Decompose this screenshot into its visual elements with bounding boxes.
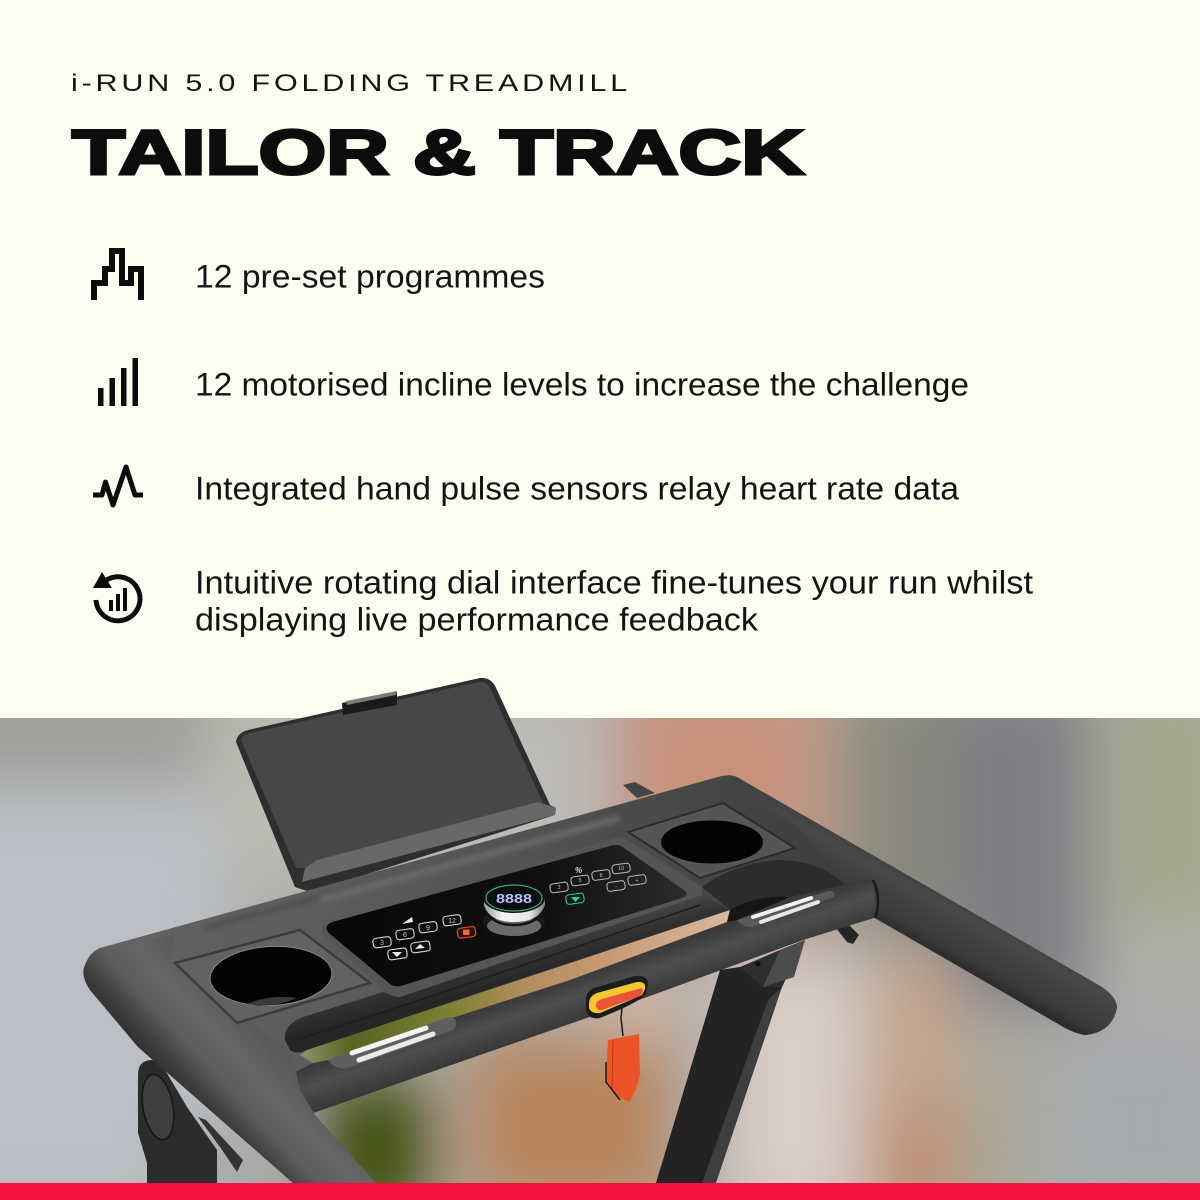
left white grip sensor	[328, 1017, 456, 1068]
crossbar	[270, 880, 877, 1113]
rotating dial	[483, 883, 546, 936]
right opening dark part	[727, 897, 790, 922]
right cup holder	[661, 820, 763, 864]
right stub lever	[836, 924, 859, 944]
opening showing background	[300, 910, 730, 1063]
icon: programme steps	[94, 251, 141, 300]
stop button	[457, 926, 476, 939]
speed buttons: 8	[599, 873, 603, 879]
left bar	[83, 935, 376, 1183]
incline buttons: 3	[380, 940, 384, 947]
right upright leg	[656, 940, 805, 1183]
incline buttons: 9	[426, 925, 430, 932]
control panel	[322, 837, 702, 997]
left cup recess	[175, 930, 370, 1023]
title: TAILOR & TRACK	[72, 118, 804, 188]
incline buttons: 6	[403, 932, 407, 939]
incline buttons	[372, 914, 462, 960]
rotating dial: 8888	[496, 891, 532, 906]
feature: incline: 12 motorised incline levels to increase the challenge	[195, 366, 969, 402]
small logo: %	[575, 866, 582, 875]
speed buttons: 10	[618, 866, 624, 872]
feature: dial interface: displaying live performance feedback	[195, 602, 759, 638]
speed buttons: +	[635, 878, 639, 884]
tablet holder	[236, 678, 556, 892]
icon: incline bars	[98, 358, 138, 406]
feature: pulse sensors: Integrated hand pulse sensors relay heart rate data	[195, 470, 960, 506]
right white grip sensor	[737, 891, 834, 927]
deck ridge: back line	[205, 794, 790, 928]
tube behind opening: right	[702, 860, 845, 910]
feature: programmes: 12 pre-set programmes	[195, 258, 545, 294]
back stub	[623, 782, 655, 798]
red footer bar	[0, 1183, 1200, 1200]
right arm	[728, 775, 1117, 1035]
left hinge and leg	[137, 1060, 243, 1183]
speed buttons: -	[615, 884, 617, 890]
band dark ridge line	[297, 905, 700, 1040]
right cup recess	[628, 803, 795, 878]
arrows	[392, 917, 425, 957]
safety button	[586, 976, 648, 1018]
icon: dial history	[93, 572, 140, 621]
band under panel	[285, 895, 730, 1052]
deck highlight	[320, 818, 620, 900]
speed buttons: 3	[557, 885, 561, 891]
start button	[565, 893, 585, 905]
frame body	[83, 776, 1117, 1183]
eyebrow: product name: i-RUN 5.0 FOLDING TREADMILL	[71, 70, 631, 97]
icon: pulse	[93, 467, 143, 505]
treadmill	[83, 678, 1117, 1183]
speed buttons	[550, 863, 647, 893]
photo: blurred background	[0, 718, 1200, 1183]
left cup holder	[209, 943, 333, 1009]
safety key	[606, 1008, 640, 1102]
collar seam	[873, 880, 878, 918]
incline buttons: 12	[448, 918, 456, 925]
feature: dial interface: Intuitive rotating dial interface fine-tunes your run whilst	[195, 564, 1033, 600]
panel lip	[322, 837, 702, 997]
feature: dial interface	[195, 564, 1033, 638]
speed buttons: 5	[578, 878, 582, 884]
